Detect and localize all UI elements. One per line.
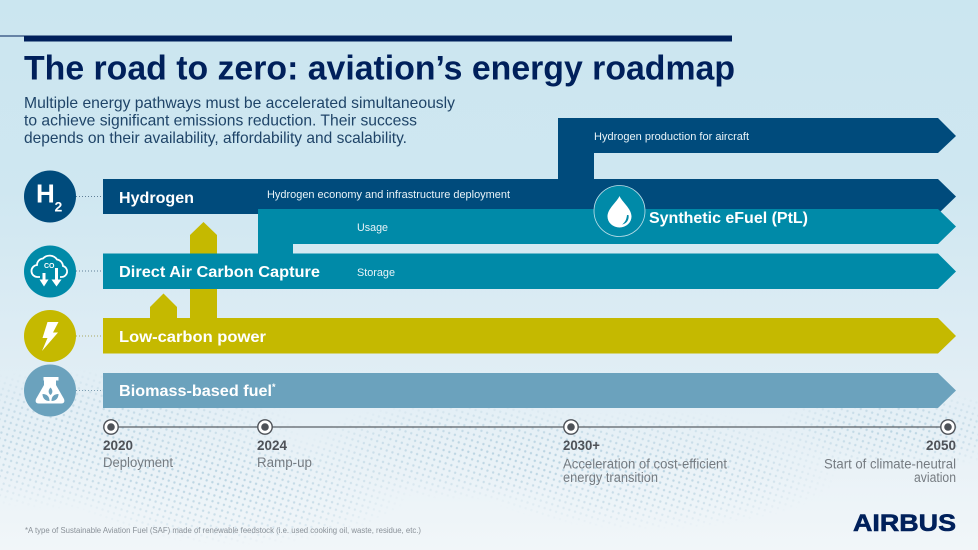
timeline label: 2050: Start of climate-neutral bbox=[824, 456, 956, 472]
icon: fuel drop bbox=[594, 186, 645, 236]
intro text: depends on their availability, affordability and scalability. bbox=[24, 130, 407, 147]
arrow: synthetic eFuel: Synthetic eFuel (PtL) bbox=[649, 210, 808, 227]
timeline label: 2050 bbox=[824, 438, 956, 485]
arrow: hydrogen bbox=[103, 179, 956, 214]
timeline label: 2020 bbox=[103, 438, 173, 470]
arrow: biomass-based fuel: Biomass-based fuel bbox=[119, 383, 272, 400]
arrow: hydrogen: Hydrogen bbox=[119, 190, 194, 207]
marker: 2024 bbox=[258, 420, 272, 434]
icon: flask with leaves bbox=[24, 364, 76, 416]
marker: 2020 bbox=[104, 420, 118, 434]
timeline label: 2020: Deployment bbox=[103, 455, 173, 470]
timeline label: 2024: 2024 bbox=[257, 438, 287, 453]
intro text: Multiple energy pathways must be accelerated simultaneously bbox=[24, 95, 455, 112]
arrow: low-carbon power: Low-carbon power bbox=[119, 329, 266, 346]
icon: hydrogen H2 bbox=[24, 170, 76, 222]
timeline label: 2050: aviation bbox=[914, 470, 956, 485]
icon: hydrogen H2: H bbox=[36, 178, 55, 208]
title: The road to zero: aviation’s energy roadmap bbox=[24, 50, 735, 88]
timeline bbox=[104, 420, 955, 434]
intro text bbox=[24, 95, 455, 147]
arrow: synthetic eFuel bbox=[258, 209, 956, 254]
arrow: low-carbon feed to direct air carbon capture bbox=[150, 294, 177, 318]
icon: CO2 cloud capture bbox=[24, 246, 76, 298]
arrow: synthetic eFuel: Usage bbox=[357, 222, 388, 234]
icon: hydrogen H2: 2 bbox=[54, 198, 62, 214]
arrow: direct air carbon capture bbox=[103, 254, 956, 289]
arrow: direct air carbon capture: Storage bbox=[357, 267, 395, 279]
arrow: low-carbon power bbox=[103, 318, 956, 354]
intro text: to achieve significant emissions reduction. Their success bbox=[24, 112, 417, 130]
footnote: *A type of Sustainable Aviation Fuel (SAF) made of renewable feedstock (i.e. used cooking oil, waste, residue, etc.) bbox=[25, 526, 421, 535]
marker: 2050 bbox=[941, 420, 955, 434]
arrow: hydrogen: Hydrogen economy and infrastructure deployment bbox=[267, 189, 510, 201]
arrow: hydrogen production for aircraft: Hydrogen production for aircraft bbox=[594, 131, 749, 143]
arrow: direct air carbon capture: Direct Air Carbon Capture bbox=[119, 264, 320, 281]
timeline label: 2030+: 2030+ bbox=[563, 438, 600, 453]
marker: 2030+ bbox=[564, 420, 578, 434]
timeline label: 2024: Ramp-up bbox=[257, 455, 312, 470]
arrow: hydrogen production for aircraft bbox=[558, 118, 956, 180]
timeline label: 2024 bbox=[257, 438, 312, 470]
timeline label: 2030+: Acceleration of cost-efficient bbox=[563, 456, 727, 472]
icon: CO2 cloud capture: CO bbox=[44, 263, 55, 270]
icon: lightning bolt bbox=[24, 310, 76, 362]
arrow: biomass-based fuel bbox=[103, 373, 956, 408]
logo: Airbus: AIRBUS bbox=[853, 510, 956, 537]
arrow: biomass-based fuel: * bbox=[272, 382, 276, 392]
timeline label: 2020: 2020 bbox=[103, 438, 133, 453]
timeline label: 2030+ bbox=[563, 438, 727, 485]
arrow: low-carbon feed to hydrogen bbox=[190, 222, 217, 318]
timeline label: 2030+: energy transition bbox=[563, 470, 658, 485]
timeline label: 2050: 2050 bbox=[926, 438, 956, 453]
